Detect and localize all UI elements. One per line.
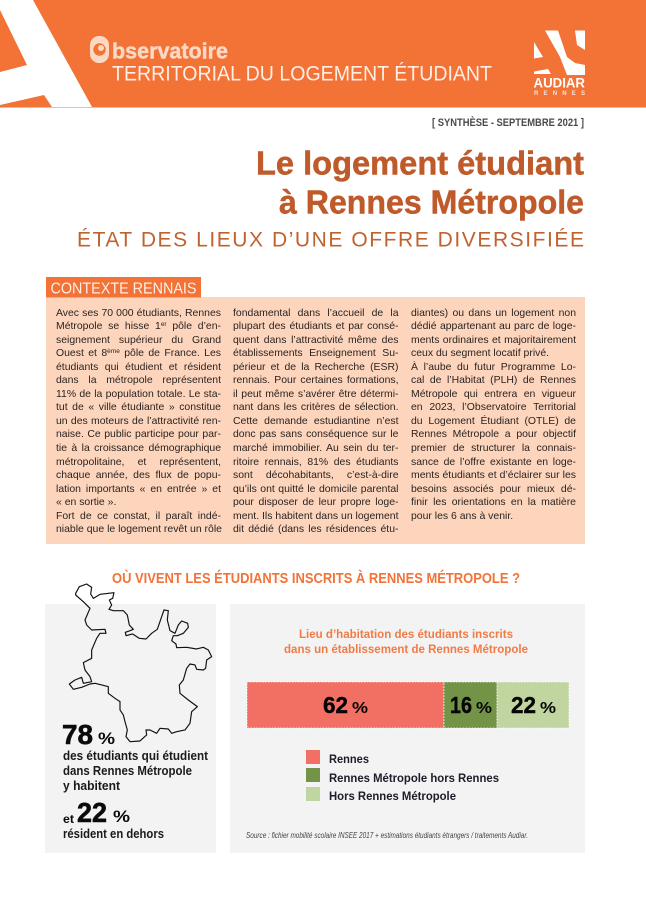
text column 1: seignement supérieur du Grand: [56, 335, 221, 346]
text column 2: périeur et de la Recherche (ESR): [233, 362, 398, 373]
chart title: dans un établissement de Rennes Métropole: [284, 644, 528, 656]
text column 3: sance de l’offre existante en loge-: [411, 457, 576, 468]
figure 78 percent: 78: [62, 719, 93, 750]
audiar logo: [534, 30, 585, 97]
text column 3: ments étudiants et d’éclairer sur les: [411, 470, 576, 481]
text column 2: il peut même s’avérer être détermi-: [233, 389, 398, 400]
panel: residence chart: [230, 604, 585, 853]
subtitle: ÉTAT DES LIEUX D’UNE OFFRE DIVERSIFIÉE: [77, 228, 584, 252]
text column 3: diantes) ou dans un logement non: [411, 308, 576, 318]
text column 2: nant dans les critères de sélection.: [233, 402, 398, 413]
caption 22 percent: résident en dehors: [63, 827, 164, 841]
text column 2: donc pas sans conséquence sur le: [233, 429, 398, 440]
audiar logo: RENNES: [534, 91, 585, 97]
text column 3: du Logement Étudiant (OTLE) de: [411, 416, 576, 427]
text column 1: métropolitaine, et représentent,: [56, 457, 221, 468]
text column 1: Ouest et 8ème pôle de France. Les: [56, 348, 221, 359]
text column 2: plupart des étudiants et par consé-: [233, 321, 398, 332]
legend: Rennes: [329, 752, 369, 766]
text column 2: Cette demande estudiantine n’est: [233, 416, 398, 427]
text column 2: fondamental dans l’accueil de la: [233, 308, 398, 318]
text column 2: établissements Enseignement Su-: [233, 348, 398, 359]
text column 1: Métropole se hisse 1er pôle d’en-: [56, 321, 221, 332]
stacked bar chart: 22: [511, 692, 536, 718]
text column 2: [233, 308, 399, 535]
text column 1: tie à la croissance démographique: [56, 443, 221, 454]
text column 3: pour les 6 ans à venir.: [411, 511, 513, 522]
text column 1: « en sortie ».: [56, 497, 116, 508]
text column 3: besoins associés pour mieux dé-: [411, 484, 576, 495]
figure 78 percent: %: [98, 729, 115, 748]
header band: [0, 0, 646, 108]
text column 3: finir les orientations en la matière: [411, 497, 576, 508]
map outline of Rennes Métropole: [69, 584, 212, 742]
text column 3: cal de l’Habitat (PLH) de Rennes: [411, 375, 576, 386]
text column 1: naise. Ce public participe pour par-: [56, 429, 221, 440]
text column 2: qu’ils ont quitté le domicile parental: [233, 484, 398, 495]
main title: [256, 144, 584, 220]
text column 1: dans la métropole représentent: [56, 375, 221, 386]
stacked bar chart: 62: [323, 692, 348, 718]
stacked bar chart: [247, 682, 569, 728]
chart title: Lieu d’habitation des étudiants inscrits: [299, 629, 513, 641]
text column 1: niable que le logement revêt un rôle: [56, 524, 222, 535]
legend: Hors Rennes Métropole: [329, 789, 456, 803]
context heading: CONTEXTE RENNAIS: [50, 280, 196, 298]
text column 1: Avec ses 70 000 étudiants, Rennes: [56, 308, 221, 318]
stacked bar chart: %: [352, 700, 368, 717]
text column 3: ceux du segment locatif privé.: [411, 348, 549, 359]
main title: à Rennes Métropole: [279, 184, 584, 220]
caption 78 percent: des étudiants qui étudient: [63, 749, 209, 763]
text column 1: étudiants qui étudient et résident: [56, 362, 221, 373]
text column 1: 11% de la population totale. Le sta-: [56, 389, 221, 400]
text column 2: dit dédié (dans les résidences étu-: [233, 524, 398, 535]
text column 3: Métropole qui entrera en vigueur: [411, 389, 576, 400]
figure 22 percent: 22: [77, 797, 107, 828]
text column 3: dédié appartenant au parc de loge-: [411, 321, 576, 332]
text column 2: pour disposer de leur propre loge-: [233, 497, 398, 508]
figure 78 percent: [62, 719, 115, 750]
caption 78 percent: dans Rennes Métropole: [63, 764, 192, 778]
stacked bar chart: %: [476, 700, 492, 717]
decorative white letter A: [0, 0, 92, 107]
section heading: OÙ VIVENT LES ÉTUDIANTS INSCRITS À RENNES MÉTROPOLE ?: [112, 569, 520, 587]
text column 1: un des moteurs de l’attractivité ren-: [56, 416, 221, 427]
text column 2: ment. Ils habitent dans un logement: [233, 511, 398, 522]
caption 78 percent: y habitent: [63, 779, 121, 793]
text column 1: tut de « ville étudiante » constitue: [56, 402, 221, 413]
observatoire wordmark: bservatoire: [112, 38, 228, 64]
text column 3: À l’aube du futur Programme Lo-: [411, 362, 576, 373]
text column 3: ments ordinaires et majoritairement: [411, 335, 576, 346]
source note: Source : fichier mobilité scolaire INSEE 2017 + estimations étudiants étrangers / traitements Audiar.: [246, 831, 528, 840]
panel: share of students: [45, 584, 216, 853]
text column 1: chaque année, des flux de popu-: [56, 470, 221, 481]
edition label: [ SYNTHÈSE - SEPTEMBRE 2021 ]: [432, 116, 584, 129]
figure 22 percent: [63, 797, 130, 828]
text column 2: ritoire rennais, 81% des étudiants: [233, 457, 398, 468]
audiar logo: AUDIAR: [534, 76, 585, 90]
stacked bar chart: %: [540, 700, 556, 717]
stacked bar chart: 16: [450, 692, 472, 718]
main title: Le logement étudiant: [256, 144, 584, 182]
text column 2: sont décohabitants, c’est-à-dire: [233, 470, 398, 481]
legend: [306, 750, 499, 803]
text column 2: marché immobilier. Au sein du ter-: [233, 443, 398, 454]
figure 22 percent: %: [113, 807, 130, 826]
legend: Rennes Métropole hors Rennes: [329, 771, 499, 785]
chart title: [284, 629, 528, 656]
text column 1: lation importants « en entrée » et: [56, 484, 221, 495]
text column 3: en 2023, l’Observatoire Territorial: [411, 402, 576, 413]
text column 3: Rennes Métropole a pour objectif: [411, 429, 576, 440]
header title: TERRITORIAL DU LOGEMENT ÉTUDIANT: [112, 63, 492, 86]
caption 78 percent: [63, 749, 209, 793]
text column 3: [411, 308, 576, 522]
context panel background: [46, 297, 585, 544]
text column 1: [56, 308, 222, 535]
figure 22 percent: et: [63, 812, 74, 826]
text column 3: premier de structurer la connais-: [411, 443, 576, 454]
text column 2: quent dans l’attractivité même des: [233, 335, 398, 346]
text column 2: rennais. Pour certaines formations,: [233, 375, 398, 386]
text column 1: Fort de ce constat, il paraît indé-: [56, 511, 221, 522]
